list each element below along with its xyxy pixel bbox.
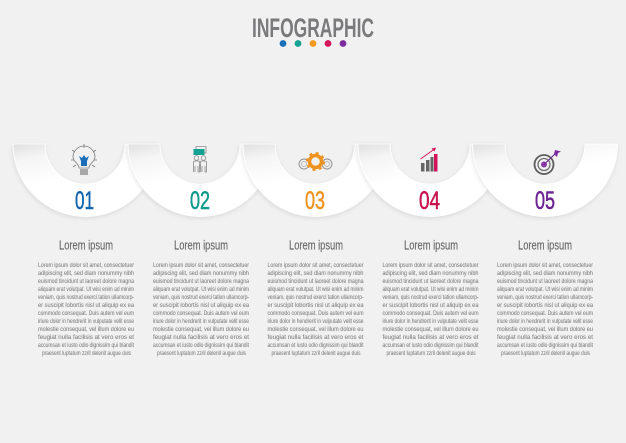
text block 1: commodo consequat. Duis autem vel eum [38,311,134,317]
text block 2: feugiat nulla facilisis at vero eros et [153,335,249,341]
panel: half ring 2 [128,144,273,217]
text block 4: praesent luptatum zzril delenit augue duis [386,351,476,357]
text block 5: accumsan et iusto odio dignissim qui blandit [497,343,593,349]
number 03: 03 [305,187,325,215]
icon: light bulb [71,144,97,174]
number 05: 05 [535,187,555,215]
text block 1: molestie consequat, vel illum dolore eu [38,327,134,333]
text block 3 [268,263,364,357]
text block 2: accumsan et iusto odio dignissim qui blandit [153,343,249,349]
text block 5 [497,263,594,357]
text block 3: euismod tincidunt ut laoreet dolore magna [268,279,364,285]
text block 4: commodo consequat. Duis autem vel eum [382,311,478,317]
text block 2: aliquam erat volutpat. Ut wisi enim ad minim [153,287,249,293]
heading 3: Lorem ipsum [289,238,343,252]
title: INFOGRAPHIC [252,13,374,43]
text block 5: er suscipit lobortis nisl ut aliquip ex ea [497,303,594,309]
text block 4 [382,263,479,357]
panel: half ring 4 [358,144,503,217]
icon: two people with speech bubble [194,146,206,172]
text block 1: euismod tincidunt ut laoreet dolore magna [38,279,135,285]
text block 5: praesent luptatum zzril delenit augue duis [501,351,590,357]
text block 5: Lorem ipsum dolor sit amet, consectetuer [497,263,593,269]
text block 4: euismod tincidunt ut laoreet dolore magna [382,279,479,285]
text block 2: veniam, quis nostrud exerci tation ullamcorp- [153,295,249,301]
icon: bar chart with rising arrow [420,148,438,172]
heading 2: Lorem ipsum [174,238,228,252]
heading 1: Lorem ipsum [59,238,113,252]
text block 1: Lorem ipsum dolor sit amet, consectetuer [38,263,134,269]
text block 2: Lorem ipsum dolor sit amet, consectetuer [153,263,249,269]
text block 5: iriure dolor in hendrerit in vulputate velit esse [497,319,594,325]
text block 4: adipiscing elit, sed diam nonummy nibh [382,271,478,277]
text block 2: praesent luptatum zzril delenit augue duis [157,351,246,357]
text block 4: er suscipit lobortis nisl ut aliquip ex ea [382,303,479,309]
text block 4: feugiat nulla facilisis at vero eros et [382,335,479,341]
text block 2 [153,263,250,357]
text block 3: commodo consequat. Duis autem vel eum [268,311,364,317]
icon: target with arrow [534,150,561,174]
text block 3: aliquam erat volutpat. Ut wisi enim ad minim [268,287,364,293]
text block 1: aliquam erat volutpat. Ut wisi enim ad minim [38,287,134,293]
text block 5: adipiscing elit, sed diam nonummy nibh [497,271,593,277]
text block 2: adipiscing elit, sed diam nonummy nibh [153,271,249,277]
text block 5: veniam, quis nostrud exerci tation ullamcorp- [497,295,593,301]
text block 2: molestie consequat, vel illum dolore eu [153,327,249,333]
text block 3: Lorem ipsum dolor sit amet, consectetuer [268,263,364,269]
text block 3: veniam, quis nostrud exerci tation ullamcorp- [268,295,364,301]
heading 4: Lorem ipsum [404,238,458,252]
number 02: 02 [190,187,210,215]
text block 4: molestie consequat, vel illum dolore eu [382,327,478,333]
text block 5: aliquam erat volutpat. Ut wisi enim ad minim [497,287,593,293]
text block 2: iriure dolor in hendrerit in vulputate velit esse [153,319,250,325]
text block 4: veniam, quis nostrud exerci tation ullamcorp- [382,295,478,301]
text block 1: iriure dolor in hendrerit in vulputate velit esse [38,319,135,325]
text block 3: feugiat nulla facilisis at vero eros et [268,335,364,341]
text block 1: adipiscing elit, sed diam nonummy nibh [38,271,134,277]
text block 1: praesent luptatum zzril delenit augue duis [42,351,131,357]
text block 4: Lorem ipsum dolor sit amet, consectetuer [382,263,478,269]
icon: gears [299,153,332,170]
text block 2: er suscipit lobortis nisl ut aliquip ex ea [153,303,250,309]
text block 2: commodo consequat. Duis autem vel eum [153,311,249,317]
text block 4: accumsan et iusto odio dignissim qui blandit [382,343,479,349]
text block 3: er suscipit lobortis nisl ut aliquip ex ea [268,303,364,309]
text block 1: er suscipit lobortis nisl ut aliquip ex ea [38,303,135,309]
text block 5: commodo consequat. Duis autem vel eum [497,311,593,317]
panel: half ring 5 [472,144,618,217]
panel: half ring 1 [13,144,158,217]
text block 2: euismod tincidunt ut laoreet dolore magna [153,279,250,285]
text block 5: euismod tincidunt ut laoreet dolore magna [497,279,594,285]
text block 5: feugiat nulla facilisis at vero eros et [497,335,593,341]
text block 3: iriure dolor in hendrerit in vulputate velit esse [268,319,364,325]
title [252,13,374,47]
text block 3: adipiscing elit, sed diam nonummy nibh [268,271,364,277]
heading 5: Lorem ipsum [518,238,572,252]
text block 3: molestie consequat, vel illum dolore eu [268,327,364,333]
number 01: 01 [75,187,94,215]
text block 3: accumsan et iusto odio dignissim qui blandit [268,343,364,349]
text block 1 [38,263,135,357]
text block 5: molestie consequat, vel illum dolore eu [497,327,593,333]
text block 1: veniam, quis nostrud exerci tation ullamcorp- [38,295,134,301]
text block 3: praesent luptatum zzril delenit augue duis [272,351,360,357]
text block 4: iriure dolor in hendrerit in vulputate velit esse [382,319,479,325]
text block 1: feugiat nulla facilisis at vero eros et [38,335,134,341]
panel: half ring 3 [243,144,388,217]
text block 1: accumsan et iusto odio dignissim qui blandit [38,343,134,349]
number 04: 04 [419,187,440,215]
text block 4: aliquam erat volutpat. Ut wisi enim ad minim [382,287,478,293]
